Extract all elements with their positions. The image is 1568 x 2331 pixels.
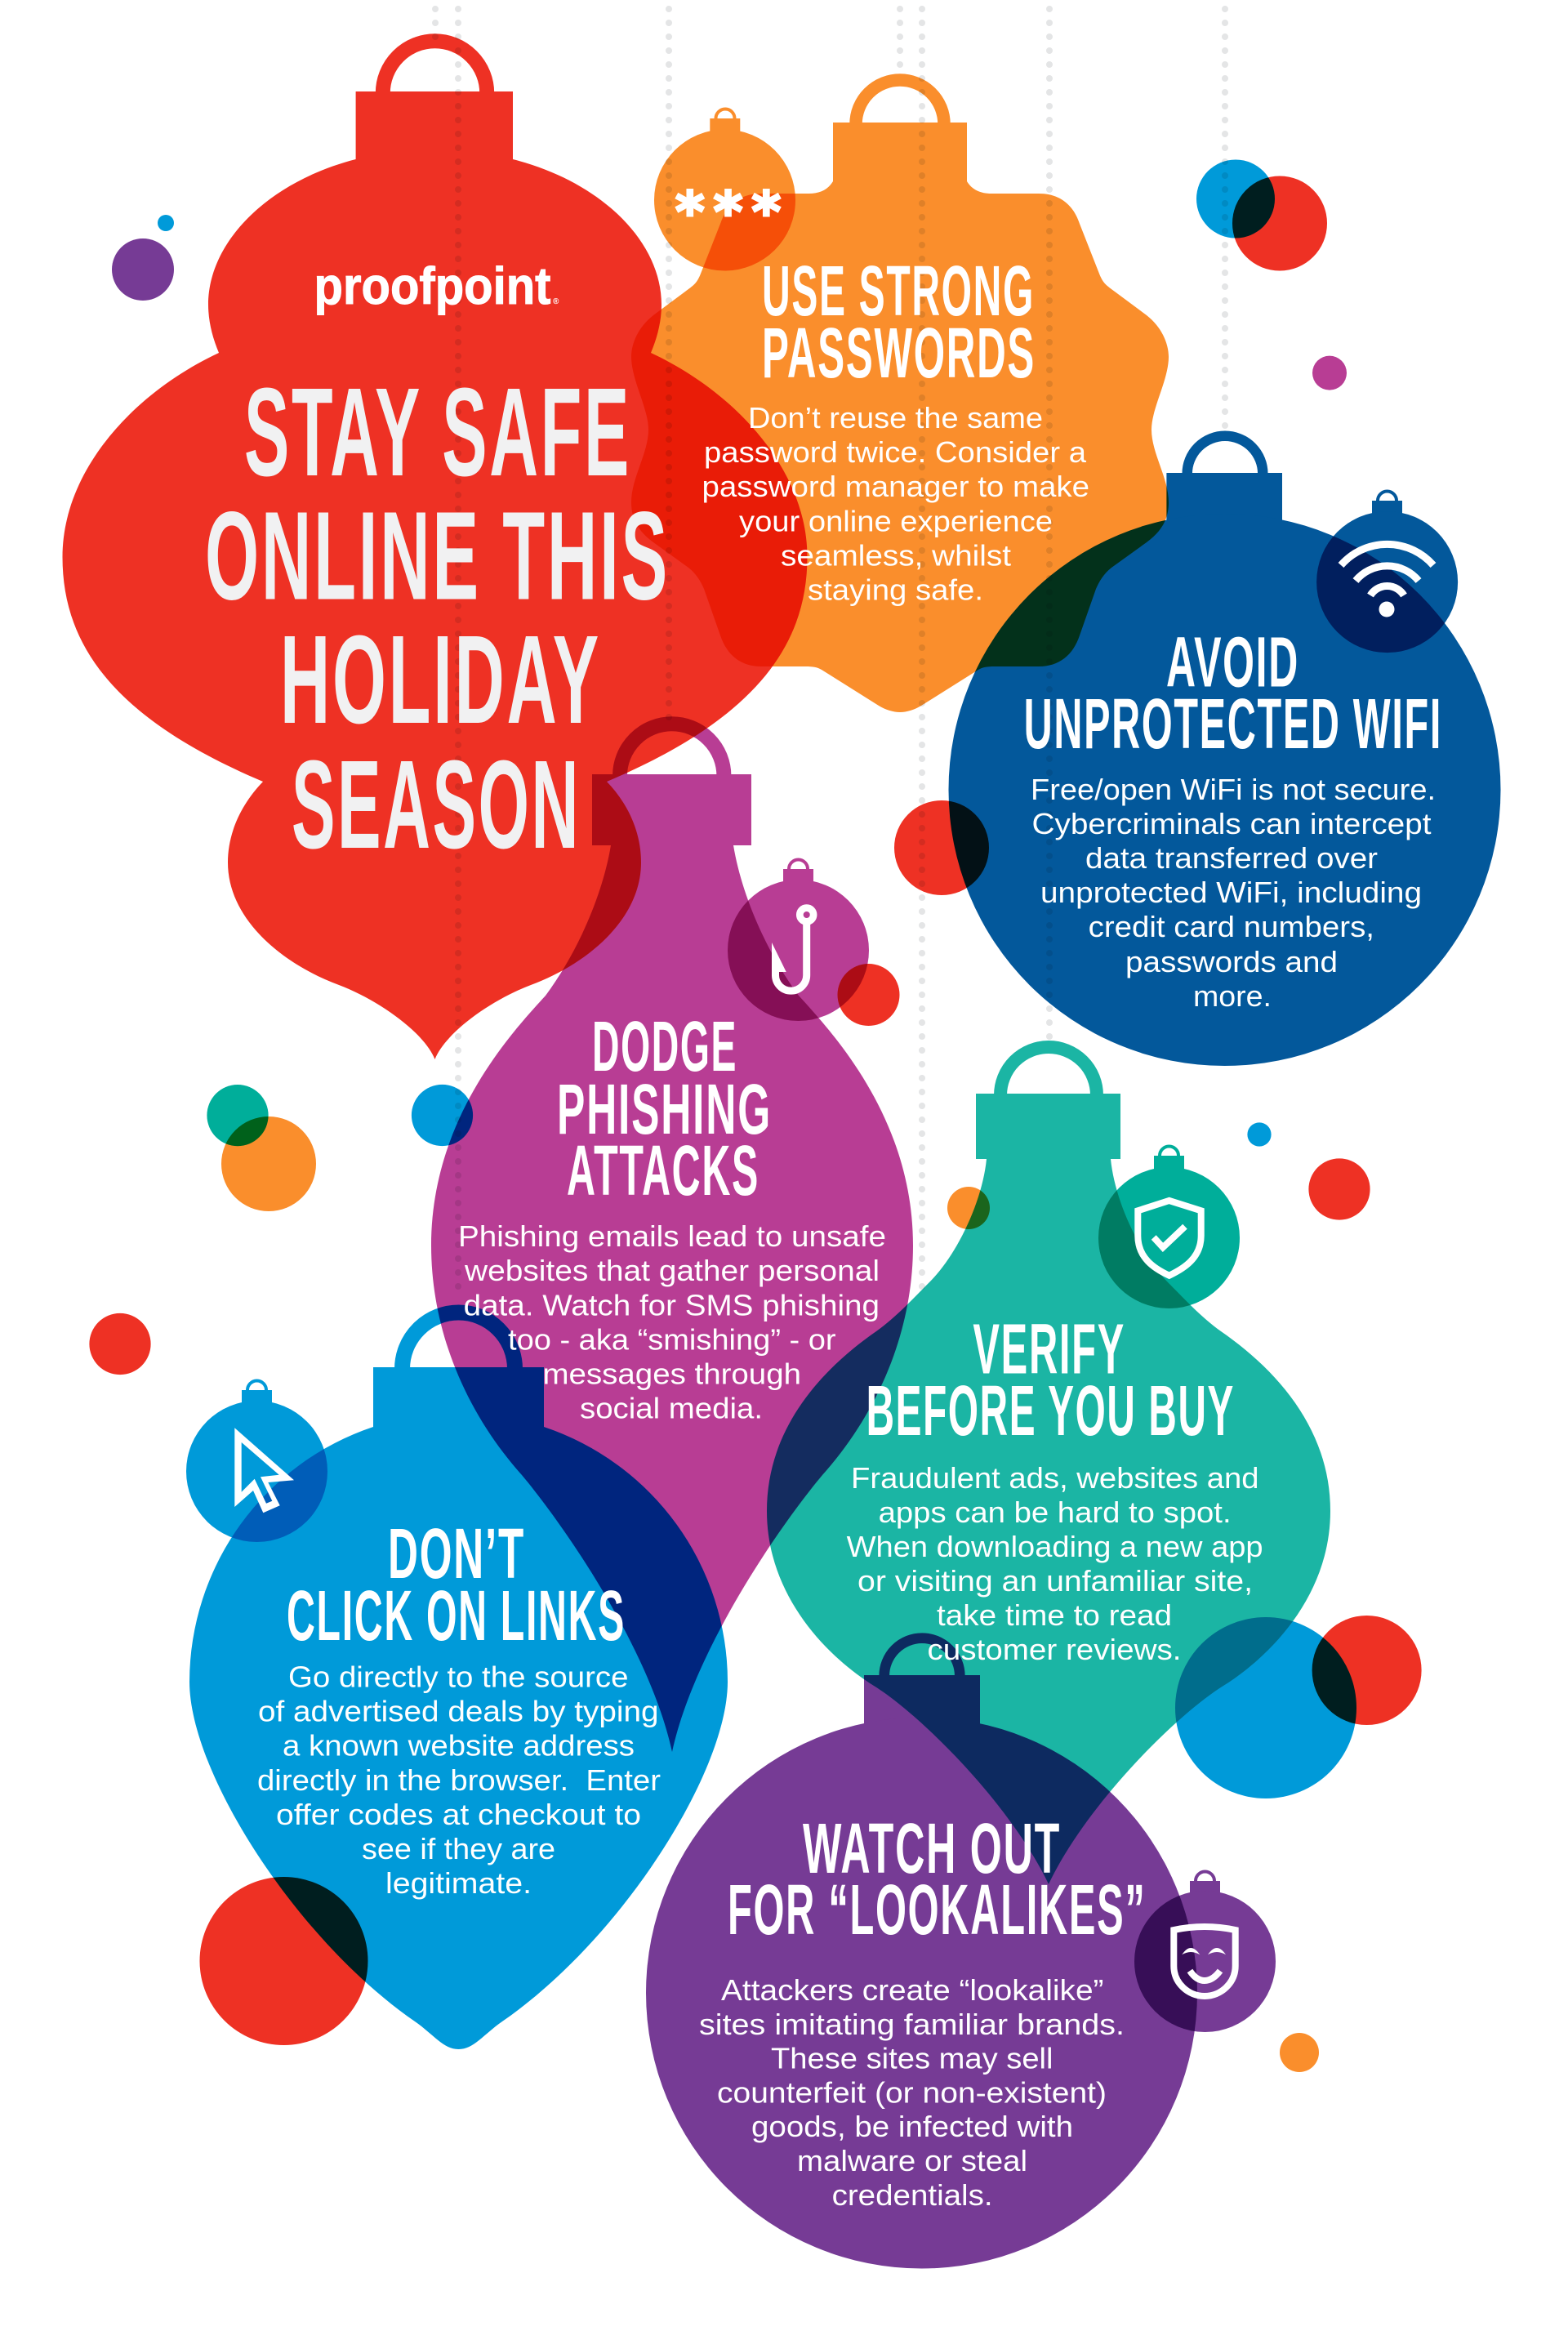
heading: use strong passwords: USE STRONG <box>762 252 1035 331</box>
text: links advice: directly in the browser. Enter <box>257 1763 661 1797</box>
icon: cursor arrow <box>234 1428 294 1513</box>
text: links advice: legitimate. <box>385 1866 532 1900</box>
heading: don't click on links <box>287 1514 626 1656</box>
text: lookalikes advice: credentials. <box>832 2178 993 2212</box>
text: wifi advice: Cybercriminals can intercept <box>1032 807 1431 840</box>
heading: watch out for lookalikes <box>728 1809 1147 1950</box>
text: phishing advice: websites that gather personal <box>464 1254 880 1287</box>
icon: smiling mask <box>1174 1927 1236 1996</box>
text: verify advice: or visiting an unfamiliar site, <box>858 1564 1253 1598</box>
mini bauble: passwords <box>654 109 795 271</box>
mini bauble: wifi <box>1316 492 1458 653</box>
text: links advice: a known website address <box>283 1729 635 1763</box>
text: wifi advice: credit card numbers, <box>1089 910 1374 943</box>
heading: don't click on links: DON’T <box>388 1514 525 1593</box>
text: verify advice: take time to read <box>937 1598 1172 1632</box>
text: links advice: offer codes at checkout to <box>276 1798 641 1831</box>
text: lookalikes advice: goods, be infected with <box>751 2110 1073 2143</box>
title: SEASON <box>292 734 581 875</box>
title <box>205 362 670 875</box>
text: passwords advice: staying safe. <box>808 573 983 607</box>
icon: password asterisks: *** <box>675 181 781 245</box>
title: HOLIDAY <box>280 609 601 750</box>
text: lookalikes advice: counterfeit (or non-existent) <box>717 2076 1107 2110</box>
text: verify advice: Fraudulent ads, websites and <box>851 1461 1259 1495</box>
heading: watch out for lookalikes: FOR “LOOKALIKES” <box>728 1870 1147 1950</box>
text: verify advice: apps can be hard to spot. <box>879 1495 1232 1529</box>
decorative dots <box>89 160 1422 2072</box>
ornament: light blue links bauble <box>189 1313 728 2049</box>
text: phishing advice <box>458 1219 886 1425</box>
text: links advice: of advertised deals by typing <box>258 1695 658 1728</box>
mini bauble: cursor <box>186 1380 327 1542</box>
text: passwords advice: your online experience <box>739 505 1053 537</box>
text: links advice <box>257 1660 661 1900</box>
icon: fish hook <box>772 908 813 991</box>
title: ONLINE THIS <box>205 485 670 626</box>
logo: proofpoint: proofpoint <box>314 256 550 315</box>
text: phishing advice: data. Watch for SMS phishing <box>464 1289 880 1321</box>
ornament: teal verify bauble <box>767 1047 1330 1884</box>
heading: use strong passwords: PASSWORDS <box>762 314 1036 393</box>
text: phishing advice: messages through <box>542 1357 801 1391</box>
text: lookalikes advice: sites imitating familiar brands. <box>699 2008 1125 2041</box>
heading: dodge phishing attacks <box>557 1007 772 1210</box>
text: links advice: Go directly to the source <box>288 1660 629 1694</box>
text: links advice: see if they are <box>362 1832 555 1865</box>
text: lookalikes advice <box>699 1973 1125 2212</box>
heading: watch out for lookalikes: WATCH OUT <box>803 1809 1061 1888</box>
ornament: red title bauble <box>62 41 807 1059</box>
text: passwords advice: seamless, whilst <box>781 539 1011 573</box>
text: phishing advice: too - aka “smishing” - or <box>508 1323 836 1356</box>
heading: verify before you buy: BEFORE YOU BUY <box>866 1371 1235 1451</box>
heading: use strong passwords <box>762 252 1036 393</box>
heading: avoid unprotected wifi <box>1024 623 1442 764</box>
text: verify advice: customer reviews. <box>928 1633 1181 1666</box>
text: phishing advice: social media. <box>580 1392 763 1425</box>
heading: avoid unprotected wifi: AVOID <box>1166 623 1299 702</box>
text: passwords advice: password manager to make <box>702 470 1089 503</box>
text: wifi advice <box>1031 773 1436 1013</box>
mini bauble: mask <box>1134 1872 1276 2032</box>
heading: verify before you buy: VERIFY <box>973 1310 1125 1388</box>
text: lookalikes advice: malware or steal <box>797 2144 1027 2177</box>
ornament: purple lookalikes bauble <box>646 1638 1197 2269</box>
text: lookalikes advice: These sites may sell <box>771 2042 1054 2075</box>
heading: verify before you buy <box>866 1310 1235 1451</box>
text: wifi advice: unprotected WiFi, including <box>1040 876 1422 909</box>
text: verify advice: When downloading a new app <box>847 1530 1263 1563</box>
text: wifi advice: passwords and <box>1125 945 1338 978</box>
icon: shield with check <box>1138 1201 1201 1276</box>
ornament: magenta phishing bauble <box>431 724 913 1752</box>
icon: wifi <box>1341 544 1433 617</box>
mini bauble: shield <box>1098 1147 1240 1308</box>
text: passwords advice: password twice. Consider a <box>704 435 1087 469</box>
heading: don't click on links: CLICK ON LINKS <box>287 1576 626 1656</box>
heading: dodge phishing attacks: PHISHING <box>557 1070 772 1149</box>
logo: proofpoint: ® <box>553 297 559 306</box>
text: verify advice <box>847 1461 1263 1666</box>
text: passwords advice <box>702 401 1089 607</box>
ornament: orange passwords bauble <box>631 80 1169 712</box>
text: wifi advice: data transferred over <box>1085 841 1378 875</box>
ornament: dark blue wifi bauble <box>949 436 1501 1066</box>
text: wifi advice: Free/open WiFi is not secure. <box>1031 773 1436 806</box>
heading: dodge phishing attacks: DODGE <box>592 1007 737 1086</box>
mini bauble: phishing <box>728 859 869 1021</box>
text: lookalikes advice: Attackers create “lookalike” <box>721 1973 1104 2007</box>
title: STAY SAFE <box>244 362 631 502</box>
text: passwords advice: Don’t reuse the same <box>748 401 1043 435</box>
heading: dodge phishing attacks: ATTACKS <box>567 1131 760 1210</box>
text: wifi advice: more. <box>1193 979 1272 1013</box>
text: phishing advice: Phishing emails lead to unsafe <box>458 1219 886 1253</box>
